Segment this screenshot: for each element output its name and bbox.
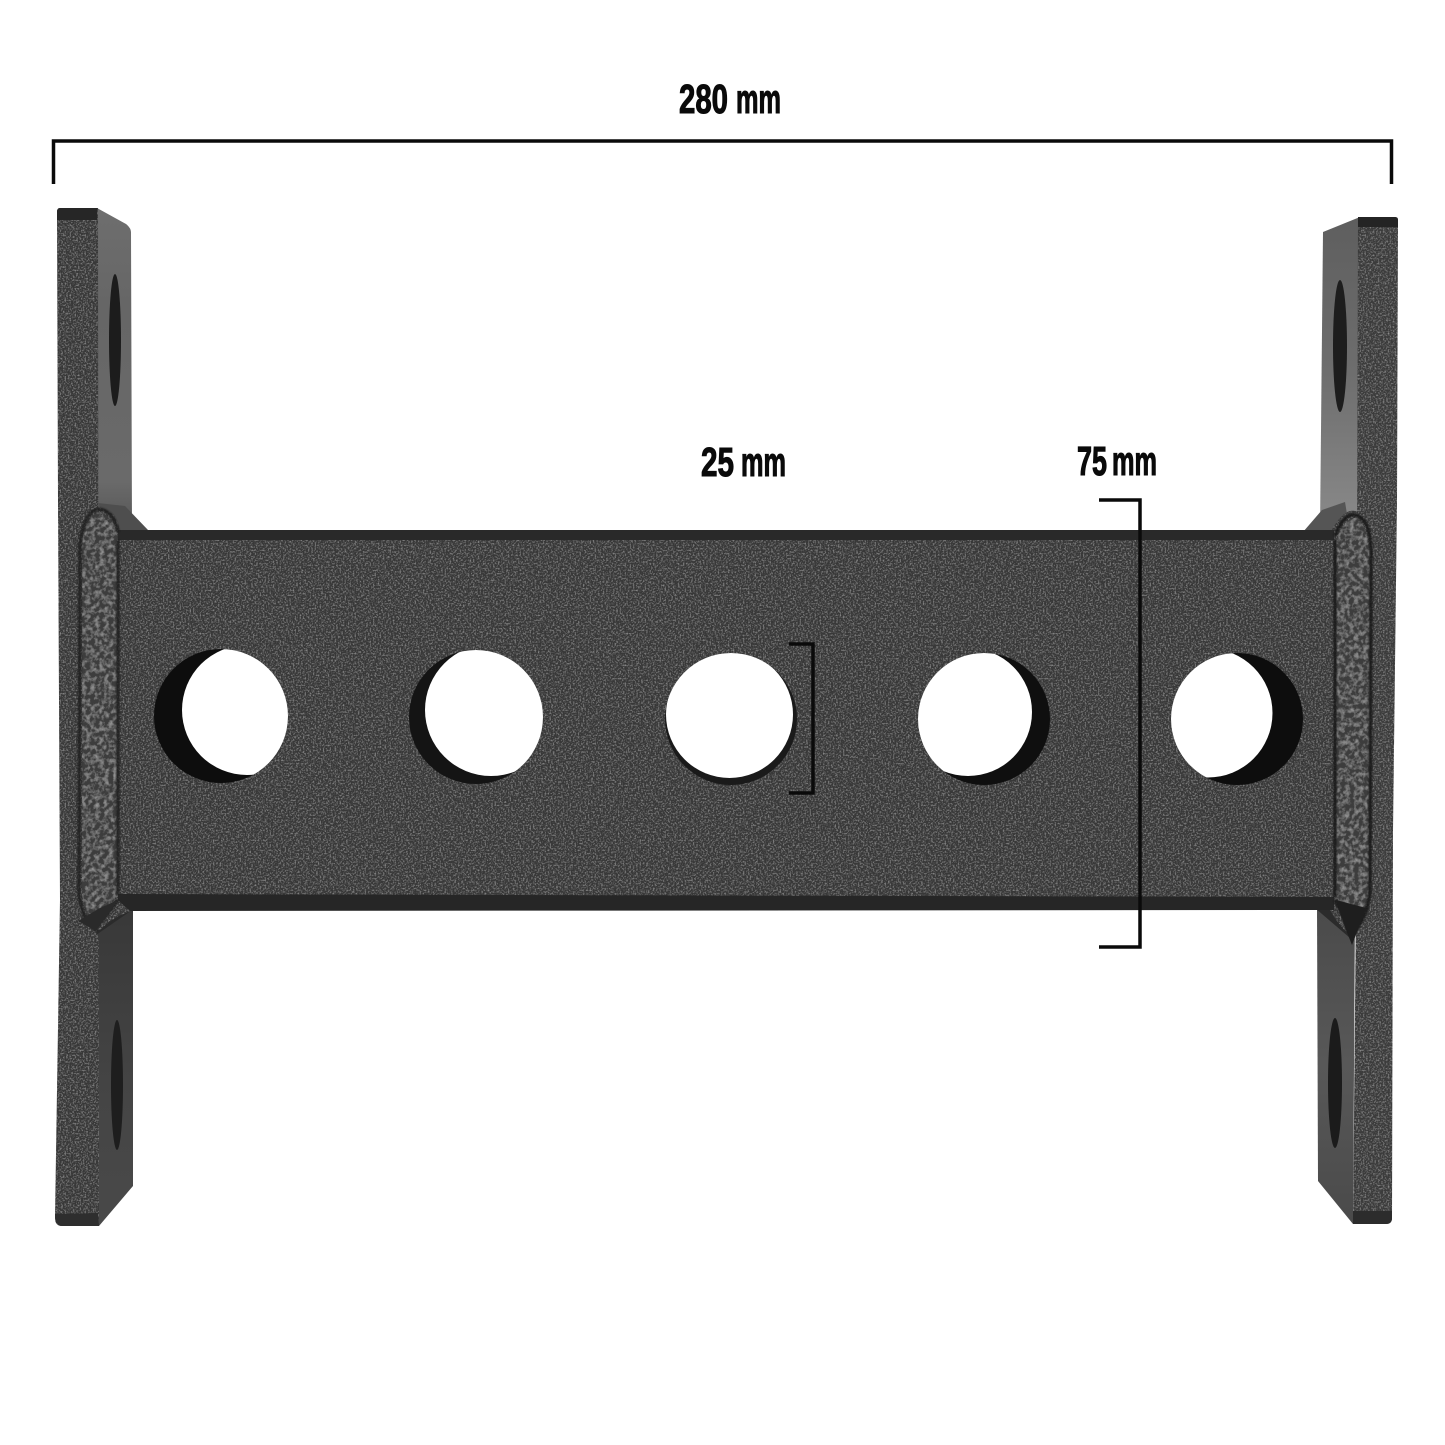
bottom left gusset [96,908,135,935]
central beam [78,508,1374,945]
hole 2 [409,650,543,784]
plate top edge shade [1358,217,1398,227]
top left gusset [98,503,148,532]
beam top dark edge [118,530,1334,540]
beam holes [154,644,1303,785]
plate lower hole [111,1020,123,1150]
height value: 75 [1077,438,1107,484]
dimension: hole diameter 25 mm [701,439,813,793]
plate bottom edge shade [1353,1211,1392,1224]
plate side face lower [1317,905,1355,1224]
plate front face [1353,217,1398,1224]
gusset welds [96,502,1354,938]
left weld bead [82,512,117,925]
width value: 280 [679,76,728,122]
left weld seam [79,509,118,929]
width bracket [54,141,1392,184]
plate side face lower [95,905,133,1226]
infographic canvas [52,84,1398,1226]
right weld seam [1335,515,1371,934]
beam face [78,508,1374,935]
left weld lower shadow [78,900,118,931]
hole 3 [665,651,797,785]
top right gusset [1303,502,1350,532]
dimension: beam height 75 mm [1077,438,1157,947]
dimension: overall width 280 mm [54,76,1392,184]
hole 5 [1171,653,1303,785]
hole 1 [154,649,288,783]
height bracket [1099,500,1140,947]
plate side face upper [95,208,132,530]
plate upper hole [109,274,121,406]
right weld bead [1336,518,1370,930]
plate side face upper [1320,217,1360,530]
plate front face [55,208,99,1226]
plate top edge shade [57,208,97,220]
width unit: mm [736,76,781,122]
diameter unit: mm [741,439,786,485]
left mounting plate [55,208,133,1226]
right mounting plate [1317,217,1398,1224]
diameter value: 25 [701,439,734,485]
plate lower hole [1328,1018,1342,1148]
plate upper hole [1333,280,1347,412]
right weld lower shadow [1336,900,1366,945]
diameter bracket [789,644,813,793]
height unit: mm [1112,438,1157,484]
hole 4 [918,653,1050,785]
bottom right gusset [1315,908,1354,938]
beam bottom dark edge [118,894,1334,911]
plate bottom edge shade [55,1213,99,1226]
